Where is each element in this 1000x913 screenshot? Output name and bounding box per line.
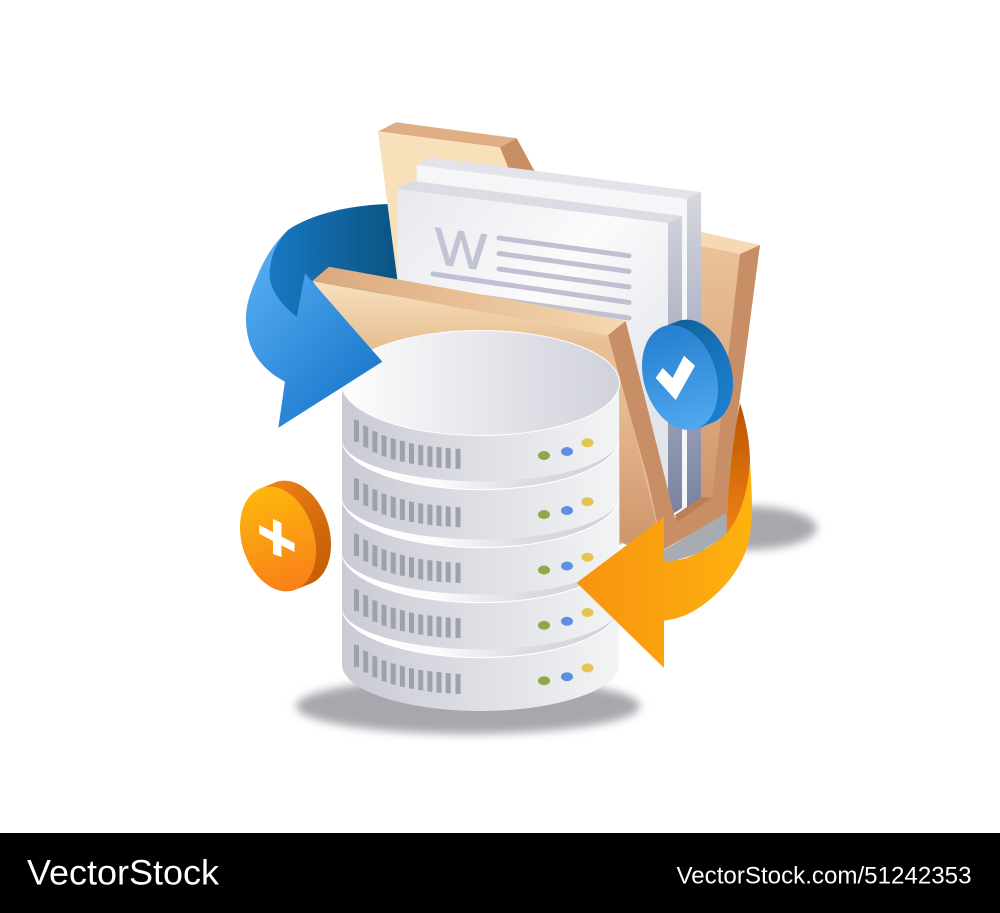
front folder <box>312 267 727 564</box>
coin face <box>228 477 328 601</box>
right folder panel <box>690 232 760 515</box>
floor shadow under tray <box>620 513 727 564</box>
page face <box>397 189 668 520</box>
band 4 lights <box>538 608 594 630</box>
shadow: under folder <box>673 506 817 550</box>
arrow inner band <box>727 403 750 533</box>
shadow: under database <box>296 678 640 734</box>
panel face <box>690 232 740 510</box>
footer brand: VectorStock <box>27 853 219 893</box>
coin edge <box>233 471 343 599</box>
blue arrow: back arc <box>269 204 400 317</box>
groove 2 <box>342 500 619 548</box>
page top edge <box>397 181 682 223</box>
coin: check <box>630 310 745 439</box>
cylinder top <box>342 330 620 436</box>
footer image id: VectorStock.com/51242353 <box>676 863 972 890</box>
back document <box>417 157 701 512</box>
blue arrow: front head <box>246 230 382 428</box>
band 4 vents <box>354 589 460 638</box>
panel side edge <box>710 245 760 515</box>
band 2 vents <box>354 478 460 527</box>
band 5 vents <box>354 644 460 694</box>
lower face <box>612 340 663 550</box>
band 5 <box>342 600 619 711</box>
band 1 <box>342 383 619 481</box>
band 4 <box>342 545 619 649</box>
W letter: W <box>435 218 488 283</box>
band 1 lights <box>538 438 594 460</box>
page top edge <box>417 157 701 199</box>
page side edge <box>687 192 701 510</box>
folder side edge <box>500 138 535 172</box>
coin: plus <box>228 471 343 601</box>
front document <box>397 181 682 520</box>
folder top edge <box>378 122 517 147</box>
folder side edge <box>608 321 727 550</box>
check mark <box>656 356 695 400</box>
arrow body and head <box>577 463 752 668</box>
plus mark <box>259 519 294 557</box>
folder back face <box>378 132 535 300</box>
band 2 lights <box>538 497 594 519</box>
tray inner edge <box>675 497 712 522</box>
band 3 lights <box>538 553 594 574</box>
folder face <box>312 281 662 545</box>
footer bar <box>0 833 1000 913</box>
groove 4 <box>342 610 619 658</box>
page face <box>417 165 687 512</box>
text lines <box>433 238 629 318</box>
page side edge <box>668 216 682 517</box>
panel top edge <box>701 232 760 254</box>
band 5 lights <box>538 663 594 685</box>
orange arrow <box>577 403 752 668</box>
band 2 <box>342 430 619 539</box>
groove 3 <box>342 555 619 603</box>
band 3 vents <box>354 533 460 583</box>
back folder <box>378 122 535 300</box>
band 1 vents <box>354 419 460 469</box>
coin face <box>630 316 730 439</box>
folder top edge <box>312 267 626 335</box>
band 3 <box>342 490 619 594</box>
groove 1 <box>342 442 619 490</box>
coin edge <box>635 310 745 438</box>
database cylinder <box>342 330 620 711</box>
